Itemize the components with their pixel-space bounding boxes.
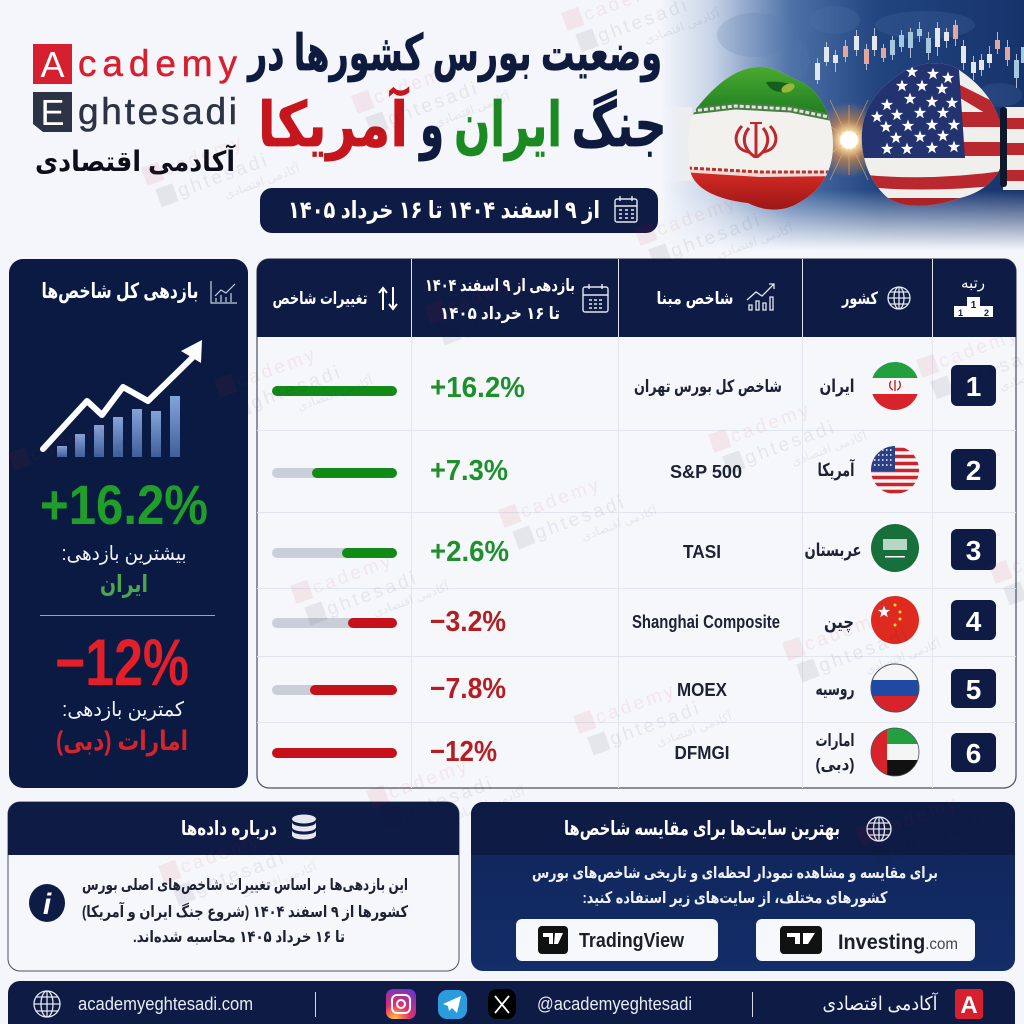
highest return: +16.2% (40, 473, 208, 536)
icon: globe (34, 991, 60, 1017)
flag: China (871, 596, 919, 644)
row 6: UAE: −12% (430, 736, 497, 768)
grid lines (257, 337, 1016, 788)
icon: instagram (386, 989, 416, 1019)
lowest return: امارات (دبی) (56, 726, 188, 757)
watermarks: ghtesadi (42, 435, 139, 487)
title: وضعیت بورس کشورها در (246, 25, 662, 83)
glove: USA (862, 63, 1024, 206)
panel: about the data (8, 802, 459, 971)
watermarks: آکادمی اقتصادی (295, 372, 375, 414)
Iran emblem (736, 122, 776, 158)
watermarks: cademy (28, 417, 114, 466)
row 5: Russia (272, 664, 996, 712)
watermarks: cademy (728, 399, 814, 448)
flag: Saudi Arabia (871, 524, 919, 572)
column: index: شاخص مبنا (656, 289, 734, 309)
row 6: UAE: 6 (966, 738, 981, 769)
watermarks: آکادمی اقتصادی (239, 858, 319, 900)
button: Investing.com (756, 919, 975, 961)
icon: database (292, 814, 316, 840)
lowest return (55, 625, 189, 757)
row 3: Saudi Arabia: +2.6% (430, 536, 509, 568)
row 6: UAE: امارات (816, 731, 854, 750)
world map silhouette (717, 6, 1022, 107)
row 5: Russia: 5 (966, 674, 981, 705)
column: country (841, 287, 910, 309)
row 1: Iran (272, 362, 996, 410)
column: index (656, 284, 774, 310)
body text: این بازدهی‌ها بر اساس تغییرات شاخص‌های اصلی بورس (82, 877, 408, 894)
panel: overall returns (9, 259, 248, 788)
watermarks: ghtesadi (192, 848, 289, 900)
highest return (40, 473, 208, 598)
watermarks: cademy (518, 474, 604, 523)
header illustration: boxing gloves over market backdrop (660, 0, 1024, 250)
heading: درباره داده‌ها (181, 818, 277, 840)
watermarks: cademy (178, 830, 264, 879)
highest return: بیشترین بازدهی: (62, 543, 186, 565)
watermarks: آکادمی اقتصادی (447, 783, 527, 825)
watermarks: آکادمی اقتصادی (863, 635, 943, 677)
logo (33, 43, 238, 177)
column: rank: 1 (971, 300, 977, 311)
body text (532, 865, 938, 907)
logo: A (40, 44, 65, 85)
icon: brand A: A (960, 992, 978, 1019)
watermarks: cademy (593, 680, 679, 729)
logo: E (40, 92, 65, 133)
brand name: آکادمی اقتصادی (822, 991, 938, 1015)
flag: USA (871, 446, 919, 494)
column: rank (954, 275, 993, 318)
watermarks: cademy (654, 192, 740, 241)
column: rank: رتبه (961, 275, 985, 292)
watermarks: ghtesadi (175, 150, 272, 202)
watermarks: آکادمی اقتصادی (715, 220, 795, 262)
icon: small chart (211, 281, 237, 303)
body text (82, 877, 409, 946)
highest return: ایران (100, 571, 148, 598)
lowest return: کمترین بازدهی: (62, 699, 184, 721)
watermarks: ghtesadi (248, 362, 345, 414)
row 4: China: چین (824, 612, 854, 633)
row 2: USA: آمریکا (818, 458, 855, 481)
row 6: UAE (272, 728, 996, 776)
column: country: کشور (841, 289, 878, 309)
title: و (418, 91, 444, 161)
watermarks: آکادمی اقتصادی (654, 708, 734, 750)
body text: کشورهای مختلف، از سایت‌های زیر استفاده کنید: (582, 890, 888, 907)
column: return period: تا ۱۶ خرداد ۱۴۰۵ (440, 304, 560, 324)
date pill: از ۹ اسفند ۱۴۰۴ تا ۱۶ خرداد ۱۴۰۵ (288, 197, 600, 224)
row 2: USA (272, 446, 996, 494)
panel heading: بازدهی کل شاخص‌ها (42, 280, 198, 303)
watermarks: آکادمی اقتصادی (642, 5, 722, 47)
candlestick backdrop (815, 20, 1024, 88)
watermarks: ghtesadi (458, 288, 555, 340)
row 2: USA: 2 (966, 455, 981, 486)
column: return period (425, 276, 608, 324)
row 4: China: 4 (966, 606, 982, 637)
watermarks: ghtesadi (532, 492, 629, 544)
row 5: Russia: MOEX (677, 680, 727, 700)
column: rank: 2 (984, 308, 989, 318)
title: آمریکا (258, 86, 409, 161)
panel: best sites (471, 802, 1015, 971)
icon: globe (867, 817, 891, 841)
social handle: @academyeghtesadi (537, 994, 692, 1014)
row 3: Saudi Arabia: 3 (966, 535, 981, 566)
glove: Iran (681, 67, 833, 210)
watermarks: ghtesadi (890, 810, 987, 862)
icon: brand A (955, 989, 983, 1019)
row 1: Iran: شاخص کل بورس تهران (634, 377, 782, 397)
date pill (260, 188, 658, 233)
flag: Iran (871, 362, 919, 410)
icon: X (488, 989, 516, 1019)
watermarks: ghtesadi (816, 625, 913, 677)
watermarks: cademy (936, 324, 1022, 373)
row 1: Iran: ایران (820, 376, 854, 397)
watermarks: ghtesadi (400, 773, 497, 825)
watermarks: ghtesadi (607, 698, 704, 750)
watermarks: آکادمی اقتصادی (505, 298, 585, 340)
button: TradingView: TradingView (579, 930, 684, 952)
row 4: China: Shanghai Composite (632, 612, 780, 632)
row 4: China (272, 596, 996, 644)
watermarks: cademy (802, 607, 888, 656)
row 3: Saudi Arabia (272, 524, 996, 572)
icon: info (29, 884, 65, 922)
row 4: China: −3.2% (430, 606, 506, 638)
title (246, 25, 666, 161)
title: جنگ (572, 89, 666, 160)
watermarks: آکادمی اقتصادی (937, 820, 1017, 862)
row 1: Iran: +16.2% (430, 372, 525, 404)
icon: telegram (438, 990, 467, 1019)
row 1: Iran: 1 (966, 371, 981, 402)
flag: Russia (871, 664, 919, 712)
spark (811, 100, 887, 180)
row 2: USA: S&P 500 (670, 462, 742, 482)
row 3: Saudi Arabia: عربستان (804, 540, 862, 561)
website: academyeghtesadi.com (78, 994, 253, 1014)
row 5: Russia: روسیه (816, 679, 854, 700)
body text: کشورها از ۹ اسفند ۱۴۰۴ (شروع جنگ ایران و آمریکا) (82, 901, 409, 921)
watermarks: آکادمی اقتصادی (579, 502, 659, 544)
logo: ghtesadi (78, 91, 237, 132)
column: return period: بازدهی از ۹ اسفند ۱۴۰۴ (425, 276, 575, 295)
watermarks: آکادمی اقتصادی (789, 427, 869, 469)
watermarks: ghtesadi (385, 78, 482, 130)
watermarks: آکادمی اقتصادی (432, 88, 512, 130)
logo: آکادمی اقتصادی (35, 144, 236, 177)
column: change: تغییرات شاخص (272, 289, 368, 309)
footer bar (8, 981, 1015, 1024)
lowest return: −12% (55, 625, 189, 699)
button: TradingView (516, 919, 718, 961)
panel: ranking table (257, 259, 1016, 788)
table header (257, 259, 1016, 337)
icon: calendar (615, 196, 637, 222)
bar chart with arrow (43, 340, 202, 457)
heading: بهترین سایت‌ها برای مقایسه شاخص‌ها (564, 818, 840, 840)
body text: تا ۱۶ خرداد ۱۴۰۵ محاسبه شده‌اند. (133, 929, 345, 946)
row 2: USA: +7.3% (430, 455, 508, 487)
column: rank: 1 (958, 308, 963, 318)
button: Investing.com: Investing.com (838, 931, 958, 954)
row 6: UAE: (دبی) (816, 755, 854, 774)
watermarks: cademy (310, 550, 396, 599)
row 5: Russia: −7.8% (430, 673, 506, 705)
watermarks: cademy (234, 344, 320, 393)
watermarks: cademy (386, 755, 472, 804)
watermarks: آکادمی اقتصادی (222, 160, 302, 202)
watermarks: آکادمی اقتصادی (89, 445, 169, 487)
watermarks: ghtesadi (668, 210, 765, 262)
watermarks: آکادمی اقتصادی (371, 578, 451, 620)
watermarks: cademy (444, 270, 530, 319)
icon: info: i (43, 888, 52, 921)
watermarks: ghtesadi (324, 568, 421, 620)
watermarks: cademy (371, 60, 457, 109)
logo: cademy (78, 43, 238, 84)
row 3: Saudi Arabia: TASI (683, 542, 721, 562)
row 6: UAE: DFMGI (674, 743, 730, 763)
flag: UAE (871, 728, 919, 776)
watermarks: ghtesadi (742, 417, 839, 469)
watermarks: cademy (876, 792, 962, 841)
title: ایران (454, 91, 562, 161)
watermarks: cademy (161, 132, 247, 181)
